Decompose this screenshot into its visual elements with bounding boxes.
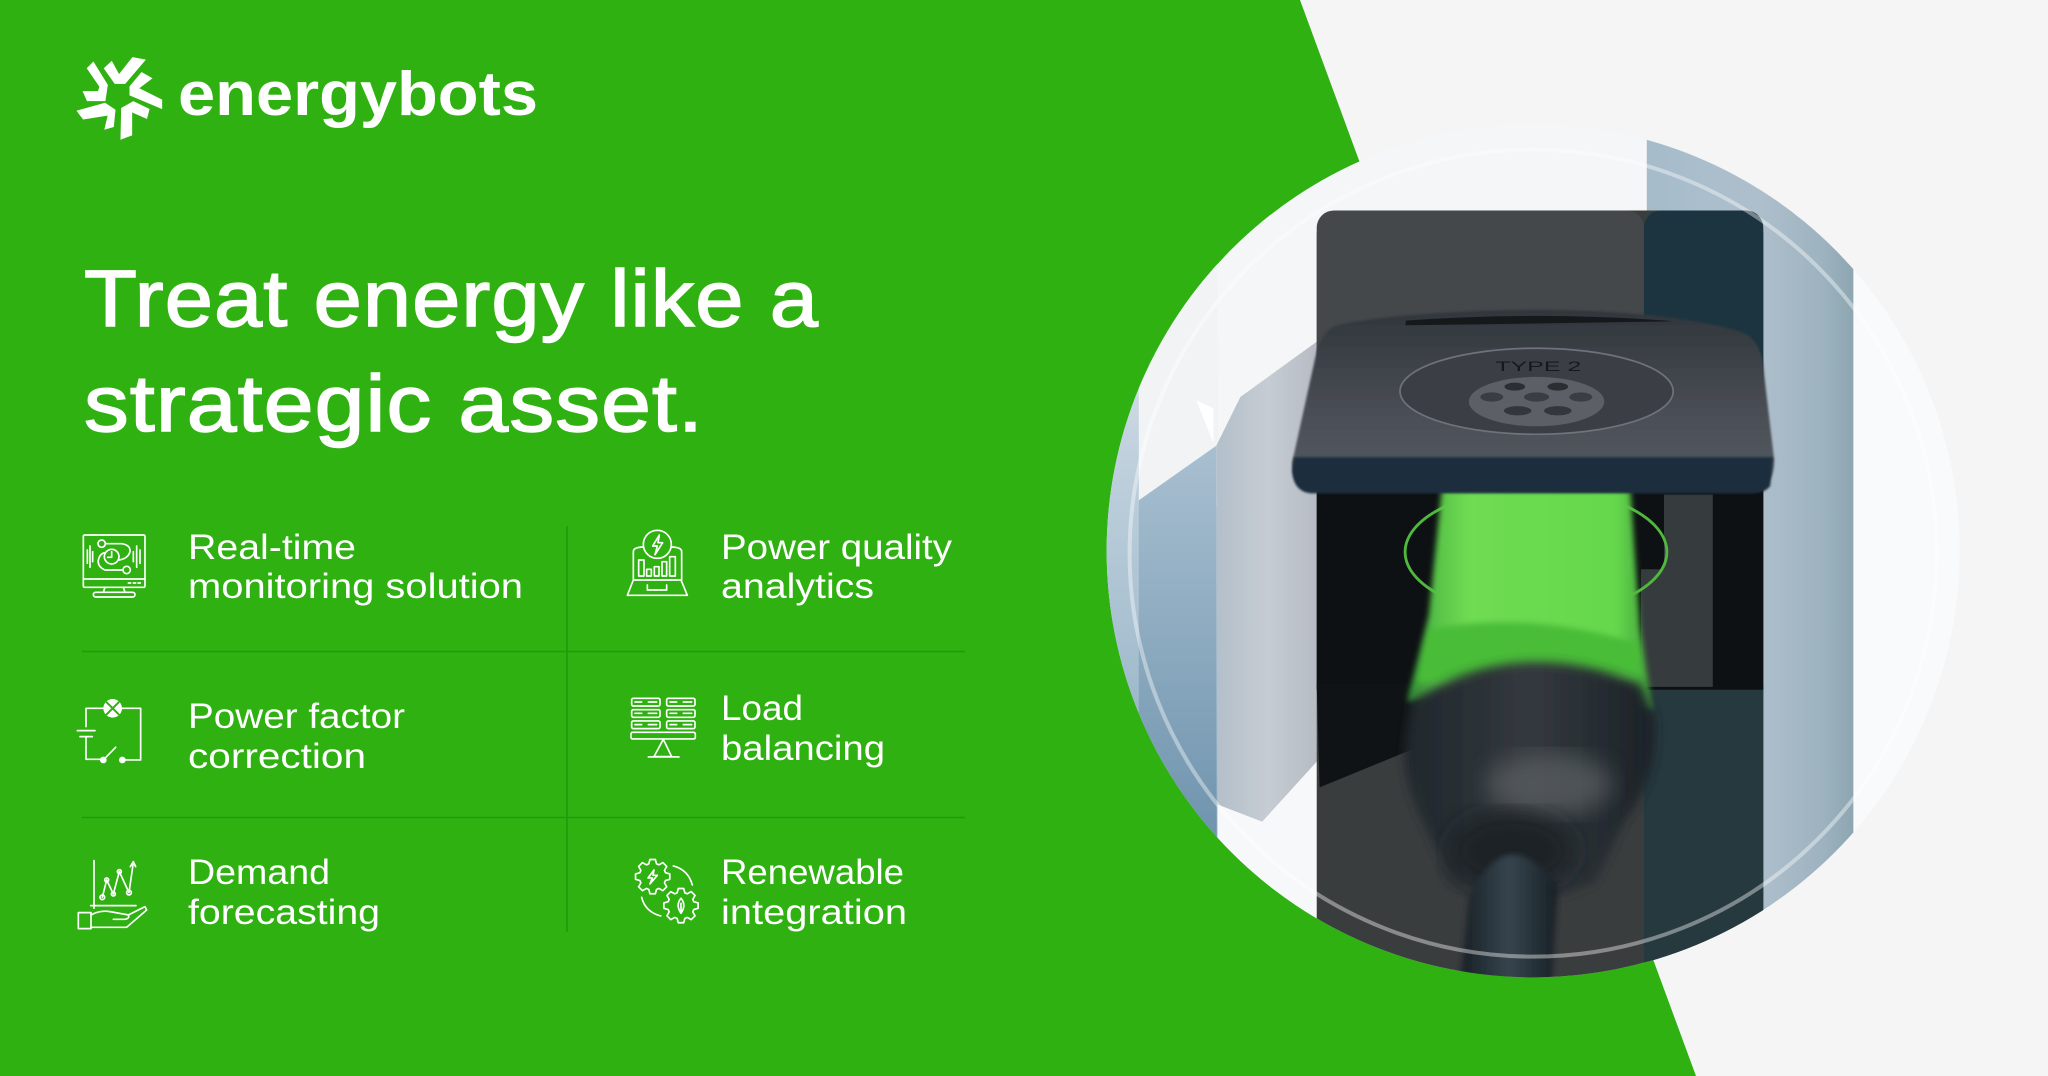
label: integration xyxy=(721,893,907,932)
label: analytics xyxy=(721,567,874,606)
label: Power quality xyxy=(721,528,953,567)
label: forecasting xyxy=(188,893,380,932)
feature: demand forecasting xyxy=(78,853,380,932)
label: balancing xyxy=(721,729,885,768)
charger cap xyxy=(1292,310,1774,493)
feature: power factor correction xyxy=(77,697,405,776)
label: Real-time xyxy=(188,528,356,567)
charger cap: TYPE 2 xyxy=(1495,359,1581,374)
label: Demand xyxy=(188,853,330,892)
icon: servers on balance xyxy=(631,698,695,757)
label xyxy=(721,528,953,606)
label xyxy=(721,853,907,932)
photo ring xyxy=(1130,150,1937,957)
photo: EV charging plug in circle xyxy=(1106,140,1854,978)
label xyxy=(188,853,380,932)
icon: laptop with bars and bolt xyxy=(627,530,687,595)
label: Power factor xyxy=(188,697,405,736)
feature: real-time monitoring xyxy=(83,528,523,606)
green handle xyxy=(1407,477,1653,710)
label xyxy=(188,697,405,776)
cable xyxy=(1460,855,1558,982)
label xyxy=(721,689,885,768)
logo xyxy=(77,58,538,139)
logo wordmark: energybots xyxy=(178,60,538,129)
black handle xyxy=(1405,662,1656,898)
heading: strategic asset. xyxy=(84,359,704,448)
feature: load balancing xyxy=(631,689,885,768)
label: monitoring solution xyxy=(188,567,523,606)
feature: power quality analytics xyxy=(627,528,953,606)
icon: electric circuit xyxy=(77,699,141,763)
label xyxy=(188,528,523,606)
feature: renewable integration xyxy=(636,853,907,932)
heading xyxy=(84,254,819,448)
label: correction xyxy=(188,737,366,776)
heading: Treat energy like a xyxy=(84,254,819,343)
icon: monitor with clock xyxy=(83,535,145,597)
icon: gears with bolt and leaf xyxy=(636,859,698,923)
label: Load xyxy=(721,689,803,728)
icon: hand holding chart xyxy=(78,861,147,929)
feature grid dividers xyxy=(82,526,965,932)
logo mark xyxy=(77,58,162,139)
label: Renewable xyxy=(721,853,904,892)
